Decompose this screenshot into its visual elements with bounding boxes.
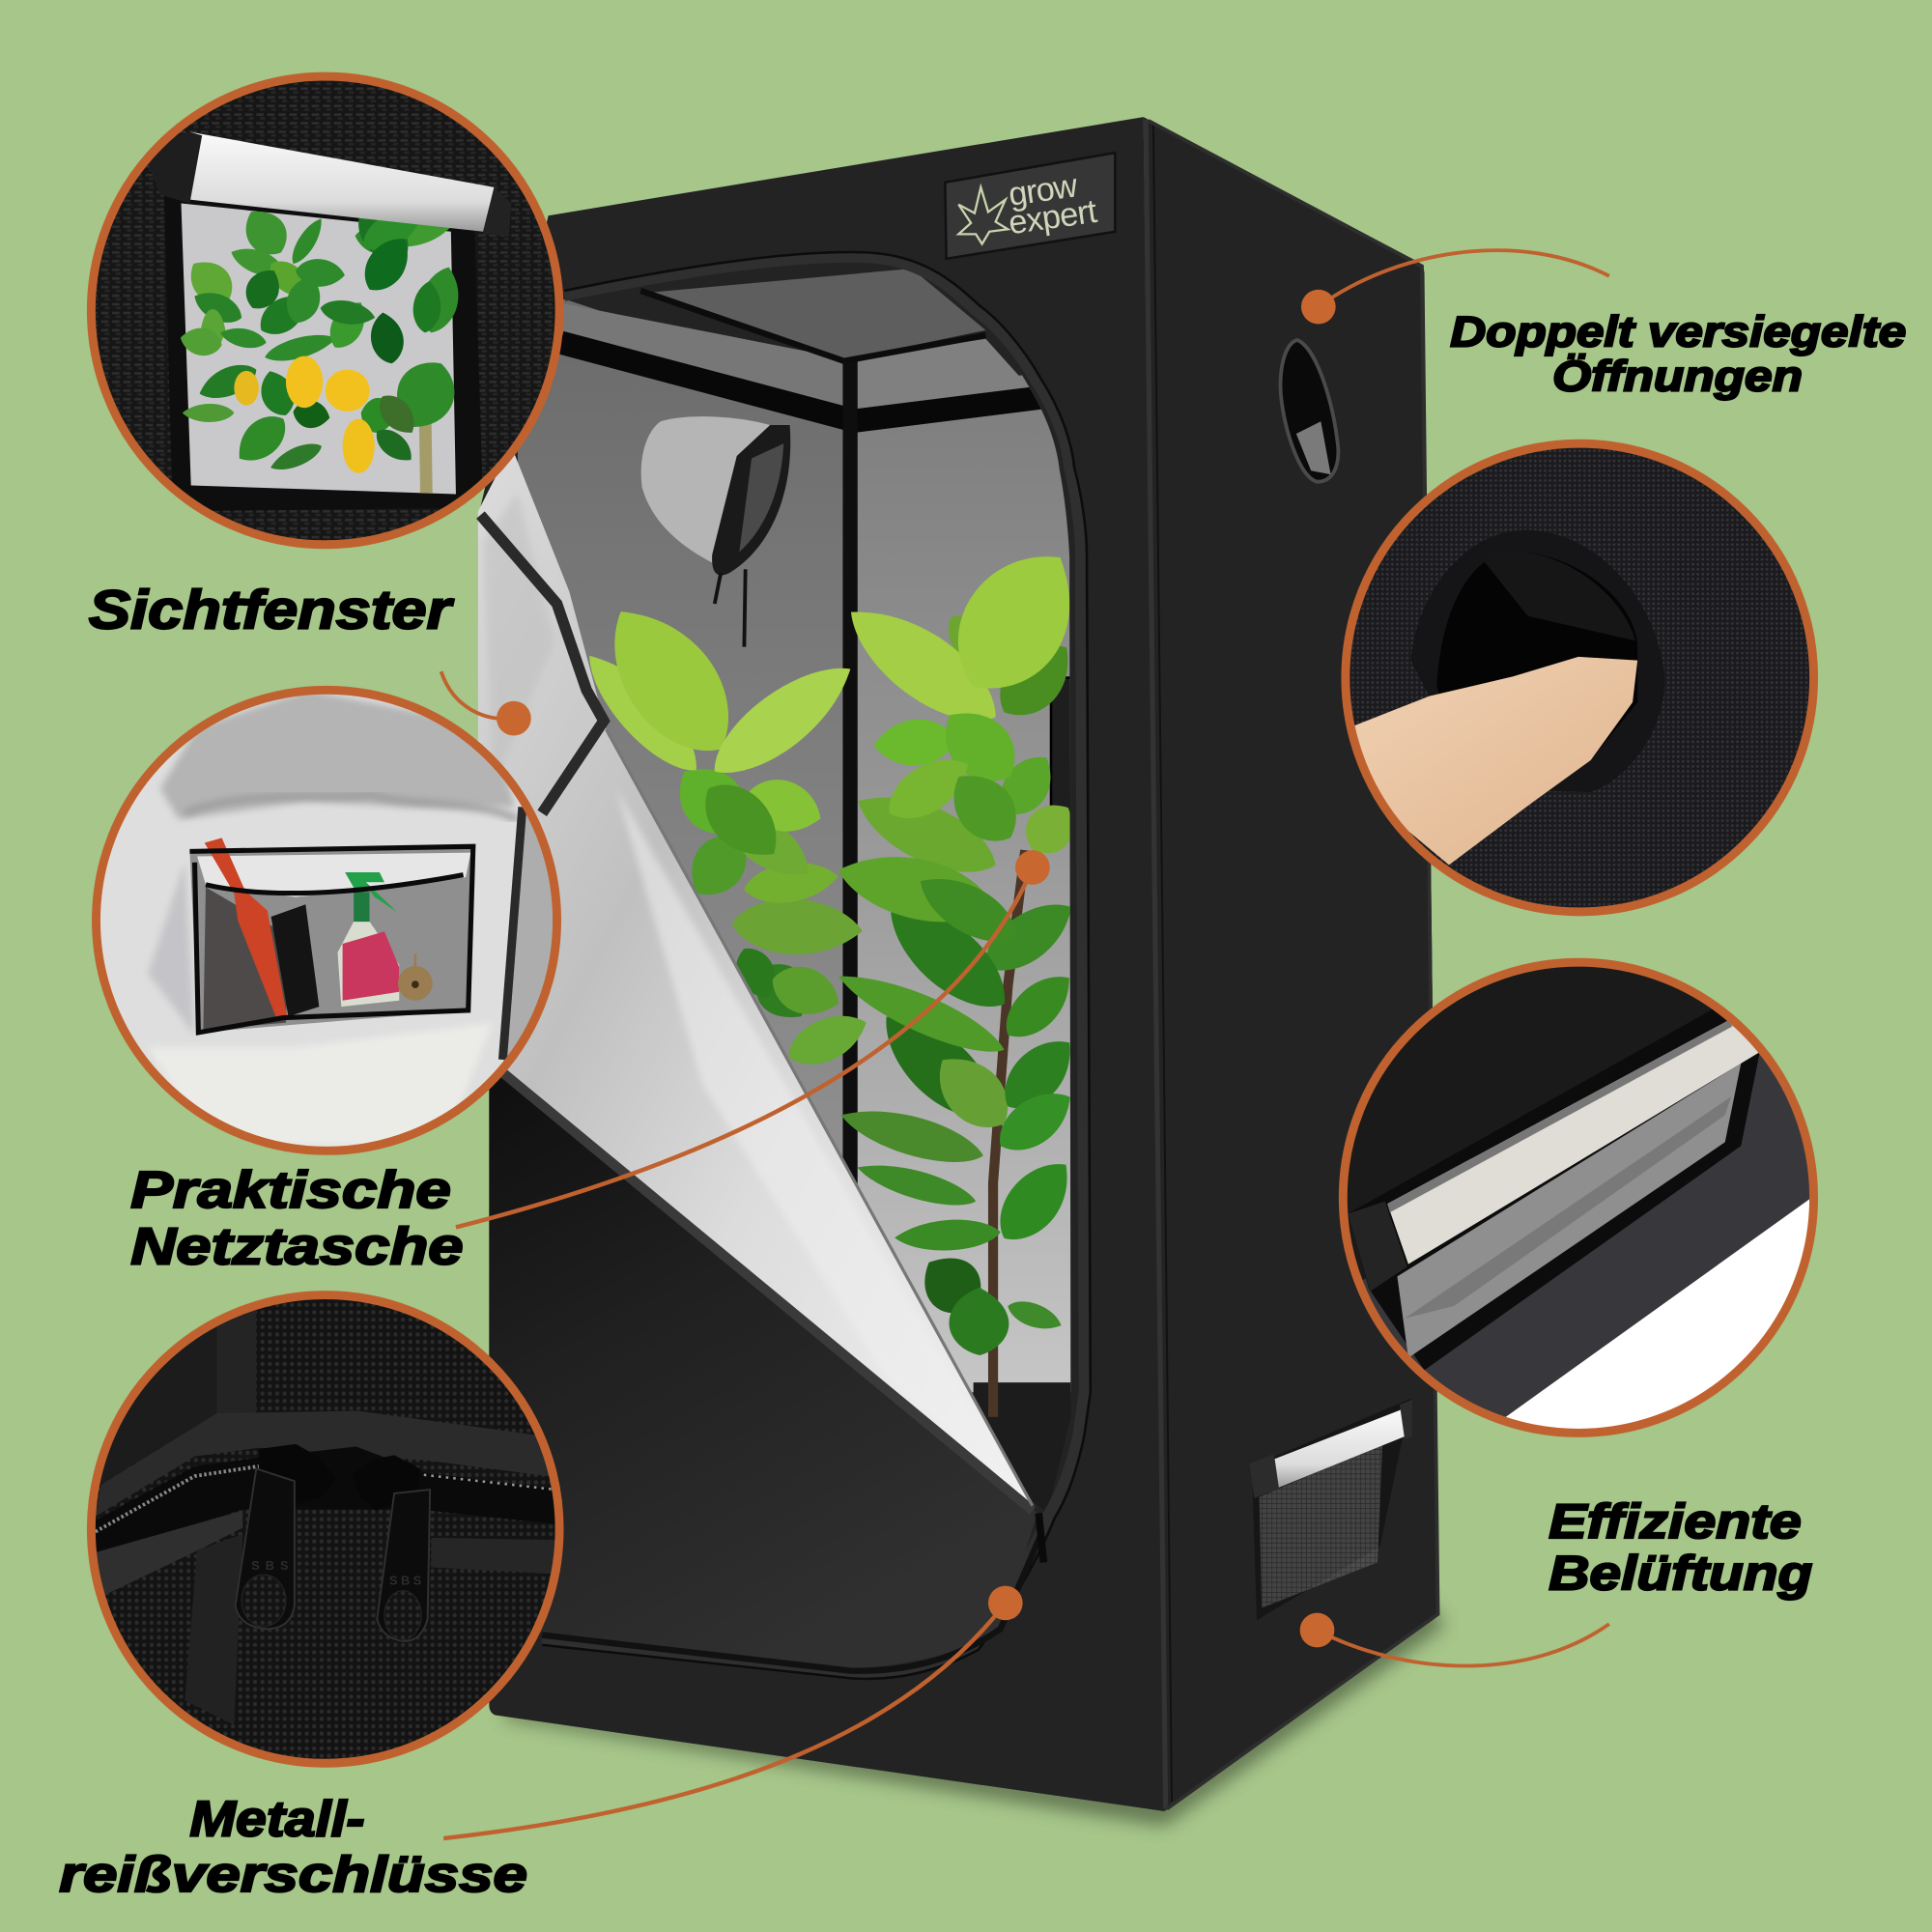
flap strap (480, 515, 604, 813)
corner pole (842, 361, 858, 1184)
lower door panel (489, 1060, 1037, 1668)
label: Praktische Netztasche (130, 1162, 464, 1276)
label: Doppelt versiegelte Öffnungen (1450, 308, 1906, 400)
roll end (1348, 1202, 1407, 1292)
black brush (271, 904, 319, 1016)
hole opening (1436, 551, 1637, 760)
label: Sichtfenster: Sichtfenster (89, 580, 454, 640)
mesh window (1397, 1064, 1741, 1358)
lemon tree trunk (425, 407, 426, 493)
ground shadow (505, 1602, 1444, 1826)
label: Doppelt versiegelte Öffnungen: Doppelt versiegelte (1450, 308, 1906, 355)
connector: Sichtfenster (441, 671, 531, 735)
red trowel (205, 838, 287, 1020)
label: Metallreißverschlüsse (59, 1792, 527, 1903)
spray bottle (337, 872, 399, 1007)
window roll (1387, 1020, 1759, 1264)
zip pull right (375, 1455, 431, 1642)
right back wall (850, 370, 1072, 1392)
upper wall (562, 303, 842, 400)
zipper pull on door (1038, 1513, 1043, 1562)
circle ring (1343, 962, 1814, 1433)
tent interior (518, 269, 1070, 1417)
tent logo label: expert (1007, 193, 1099, 242)
window pane (182, 203, 456, 494)
zipper band (96, 1447, 554, 1551)
side hole (1281, 340, 1338, 482)
circle ring (91, 76, 559, 545)
ceiling (640, 269, 985, 359)
window frame (164, 185, 483, 511)
black frame bands (560, 343, 848, 419)
door zipper frame (542, 257, 1084, 1674)
tent zipper band in circle (503, 814, 553, 1061)
left back wall (518, 299, 842, 1157)
label: Effiziente Belüftung (1548, 1494, 1812, 1600)
lemons (234, 356, 375, 473)
flap hem (499, 1069, 1033, 1511)
citrus leaves (180, 211, 458, 469)
callout circle: sealed openings (1337, 438, 1824, 918)
label: Effiziente Belüftung: Belüftung (1548, 1546, 1812, 1600)
tent corner seam (1146, 120, 1166, 1808)
pocket edges (189, 846, 473, 1033)
zip pull left (235, 1444, 309, 1630)
circle ring (1346, 443, 1814, 912)
side vent (1249, 1399, 1412, 1620)
top-left side fabric (100, 1327, 216, 1484)
product: grow tent (478, 117, 1444, 1826)
twine ball (398, 966, 433, 1001)
arm (1337, 657, 1637, 865)
label: Effiziente Belüftung: Effiziente (1548, 1494, 1802, 1548)
label: Doppelt versiegelte Öffnungen: Öffnungen (1552, 353, 1803, 400)
label: Praktische Netztasche: Netztasche (130, 1219, 464, 1276)
callout circle: metal zippers (86, 1293, 567, 1768)
label: Metallreißverschlüsse: reißverschlüsse (59, 1847, 527, 1903)
logo leaf (958, 187, 1008, 244)
circle ring (96, 690, 557, 1151)
circle ring (91, 1295, 559, 1763)
connector: Doppelt versiegelte Öffnungen (1301, 250, 1609, 324)
zip pull left: SBS (251, 1558, 288, 1573)
callout circle: viewing window (86, 74, 567, 554)
logo wordmark: grow (1007, 167, 1080, 213)
duct sock (641, 416, 790, 647)
mesh pocket (189, 838, 473, 1033)
hole rim (1410, 529, 1664, 792)
plant trunk (993, 850, 1025, 1417)
callout circle: mesh pocket (86, 684, 579, 1158)
connector: Metallreißverschlüsse (443, 1586, 1023, 1838)
tent side face (1144, 117, 1439, 1811)
lower panel (1348, 1047, 1824, 1423)
connector: Praktische Netztasche (456, 850, 1050, 1227)
plant leaves (589, 556, 1070, 1355)
label: Metallreißverschlüsse: Metall- (189, 1792, 365, 1848)
tent front face (478, 117, 1164, 1811)
label: Praktische Netztasche: Praktische (130, 1162, 451, 1219)
side vent on the right wall (1051, 678, 1072, 813)
white background wedge (1497, 1189, 1824, 1454)
velcro frame (1348, 1008, 1759, 1370)
callout circle: ventilation (1337, 955, 1824, 1454)
tray floor (974, 1382, 1070, 1393)
window roll (189, 131, 494, 232)
foil wrinkles (160, 690, 515, 819)
connector: Effiziente Belüftung (1300, 1613, 1609, 1665)
zip pull right: SBS (389, 1573, 421, 1587)
tent logo label (945, 153, 1115, 259)
seam strap (216, 1306, 256, 1417)
folded door flap with silver lining (478, 446, 1033, 1511)
